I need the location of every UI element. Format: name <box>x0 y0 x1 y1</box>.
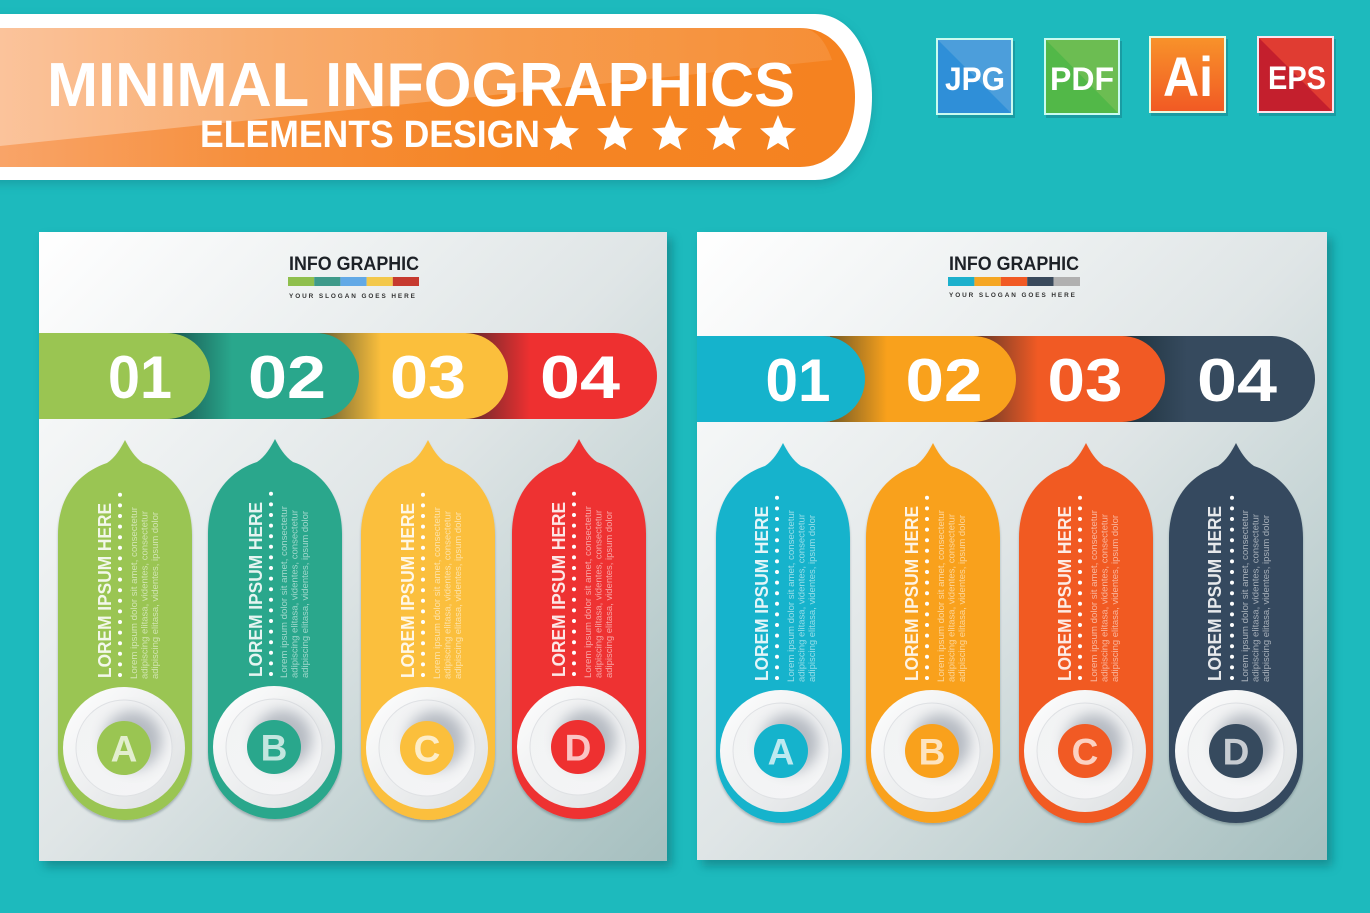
subtitle: ELEMENTS DESIGN <box>200 114 540 156</box>
capsule A: A <box>768 732 794 772</box>
capsule A: Lorem ipsum dolor sit amet, consectetur <box>785 510 796 682</box>
number 02: 02 <box>906 347 982 414</box>
capsule A: adipiscing elitasa, videntes, ipsum dolor <box>806 515 817 682</box>
capsule C: LOREM IPSUM HERE <box>1055 506 1075 681</box>
capsule D: LOREM IPSUM HERE <box>549 502 569 677</box>
capsule A: adipiscing elitasa, videntes, ipsum dolor <box>149 512 160 679</box>
capsule A: LOREM IPSUM HERE <box>95 503 115 678</box>
icon: Ai badge: Ai <box>1163 45 1213 108</box>
capsule B: adipiscing elitasa, videntes, ipsum dolor <box>299 511 310 678</box>
icon: JPG badge: JPG <box>945 61 1005 97</box>
capsule B <box>866 443 1000 823</box>
capsule D: adipiscing elitasa, videntes, ipsum dolor <box>1260 515 1271 682</box>
panel: left infographic <box>39 232 672 867</box>
capsule C: C <box>1072 732 1098 772</box>
capsule B: LOREM IPSUM HERE <box>902 506 922 681</box>
capsule D: adipiscing elitasa, videntes, consectetur <box>1250 514 1260 682</box>
number band <box>39 333 657 419</box>
capsule A: adipiscing elitasa, videntes, consectetur <box>138 511 150 679</box>
number 04: 04 <box>540 344 621 411</box>
icon: PDF badge: PDF <box>1050 61 1114 97</box>
capsule D: adipiscing elitasa, videntes, ipsum dolor <box>603 511 614 678</box>
capsule A: A <box>111 728 137 770</box>
capsule B: Lorem ipsum dolor sit amet, consectetur <box>935 510 946 682</box>
icon: PDF badge <box>1044 38 1122 118</box>
capsule B <box>208 439 342 819</box>
capsule B: adipiscing elitasa, videntes, consectetur <box>946 514 956 682</box>
capsule D: Lorem ipsum dolor sit amet, consectetur <box>1239 510 1250 682</box>
capsule D: adipiscing elitasa, videntes, consectetur <box>592 510 604 678</box>
number 01: 01 <box>108 344 172 411</box>
capsule C: adipiscing elitasa, videntes, consectetur <box>442 511 452 679</box>
icon: EPS badge <box>1257 36 1336 116</box>
number 04: 04 <box>1197 347 1278 414</box>
capsule C: adipiscing elitasa, videntes, consectetur <box>1098 514 1110 682</box>
capsule C <box>361 440 495 820</box>
capsule A <box>716 443 850 823</box>
capsule D <box>512 439 646 819</box>
capsule C: Lorem ipsum dolor sit amet, consectetur <box>1088 510 1099 682</box>
capsule A: Lorem ipsum dolor sit amet, consectetur <box>128 507 139 679</box>
panel: right infographic <box>697 232 1332 866</box>
capsule B: adipiscing elitasa, videntes, ipsum dolor <box>956 515 967 682</box>
capsule C: Lorem ipsum dolor sit amet, consectetur <box>431 507 442 679</box>
rating stars <box>543 115 796 150</box>
capsule D: D <box>565 728 591 768</box>
capsule B: LOREM IPSUM HERE <box>246 502 266 677</box>
header banner <box>0 14 872 184</box>
title: MINIMAL INFOGRAPHICS <box>47 51 795 120</box>
capsule C <box>1019 443 1153 823</box>
number 03: 03 <box>390 344 466 411</box>
capsule C: adipiscing elitasa, videntes, ipsum dolor <box>1109 515 1120 682</box>
logo: info graphic: YOUR SLOGAN GOES HERE <box>289 293 417 300</box>
capsule D: Lorem ipsum dolor sit amet, consectetur <box>582 506 593 678</box>
icon: EPS badge: EPS <box>1268 60 1326 96</box>
logo: info graphic: INFO GRAPHIC <box>289 254 419 275</box>
number 02: 02 <box>248 344 326 411</box>
capsule B: B <box>261 728 287 768</box>
logo: info graphic <box>288 254 419 300</box>
capsule A: adipiscing elitasa, videntes, consectetur <box>796 514 806 682</box>
capsule D <box>1169 443 1303 823</box>
capsule A: LOREM IPSUM HERE <box>752 506 772 681</box>
logo: info graphic: INFO GRAPHIC <box>949 254 1079 275</box>
number 03: 03 <box>1048 347 1122 414</box>
capsule C: adipiscing elitasa, videntes, ipsum dolor <box>452 512 463 679</box>
logo: info graphic <box>948 254 1080 299</box>
capsule D: D <box>1223 732 1249 772</box>
logo: info graphic: YOUR SLOGAN GOES HERE <box>949 292 1077 299</box>
capsule B: B <box>919 732 945 772</box>
capsule D: LOREM IPSUM HERE <box>1205 506 1225 681</box>
capsule B: Lorem ipsum dolor sit amet, consectetur <box>278 506 289 678</box>
icon: JPG badge <box>936 38 1015 118</box>
capsule C: LOREM IPSUM HERE <box>398 503 418 678</box>
capsule B: adipiscing elitasa, videntes, consectetur <box>288 510 300 678</box>
number band <box>697 336 1315 422</box>
number 01: 01 <box>766 347 830 414</box>
icon: Ai badge <box>1149 36 1228 116</box>
capsule C: C <box>414 728 440 770</box>
capsule A <box>58 440 192 820</box>
